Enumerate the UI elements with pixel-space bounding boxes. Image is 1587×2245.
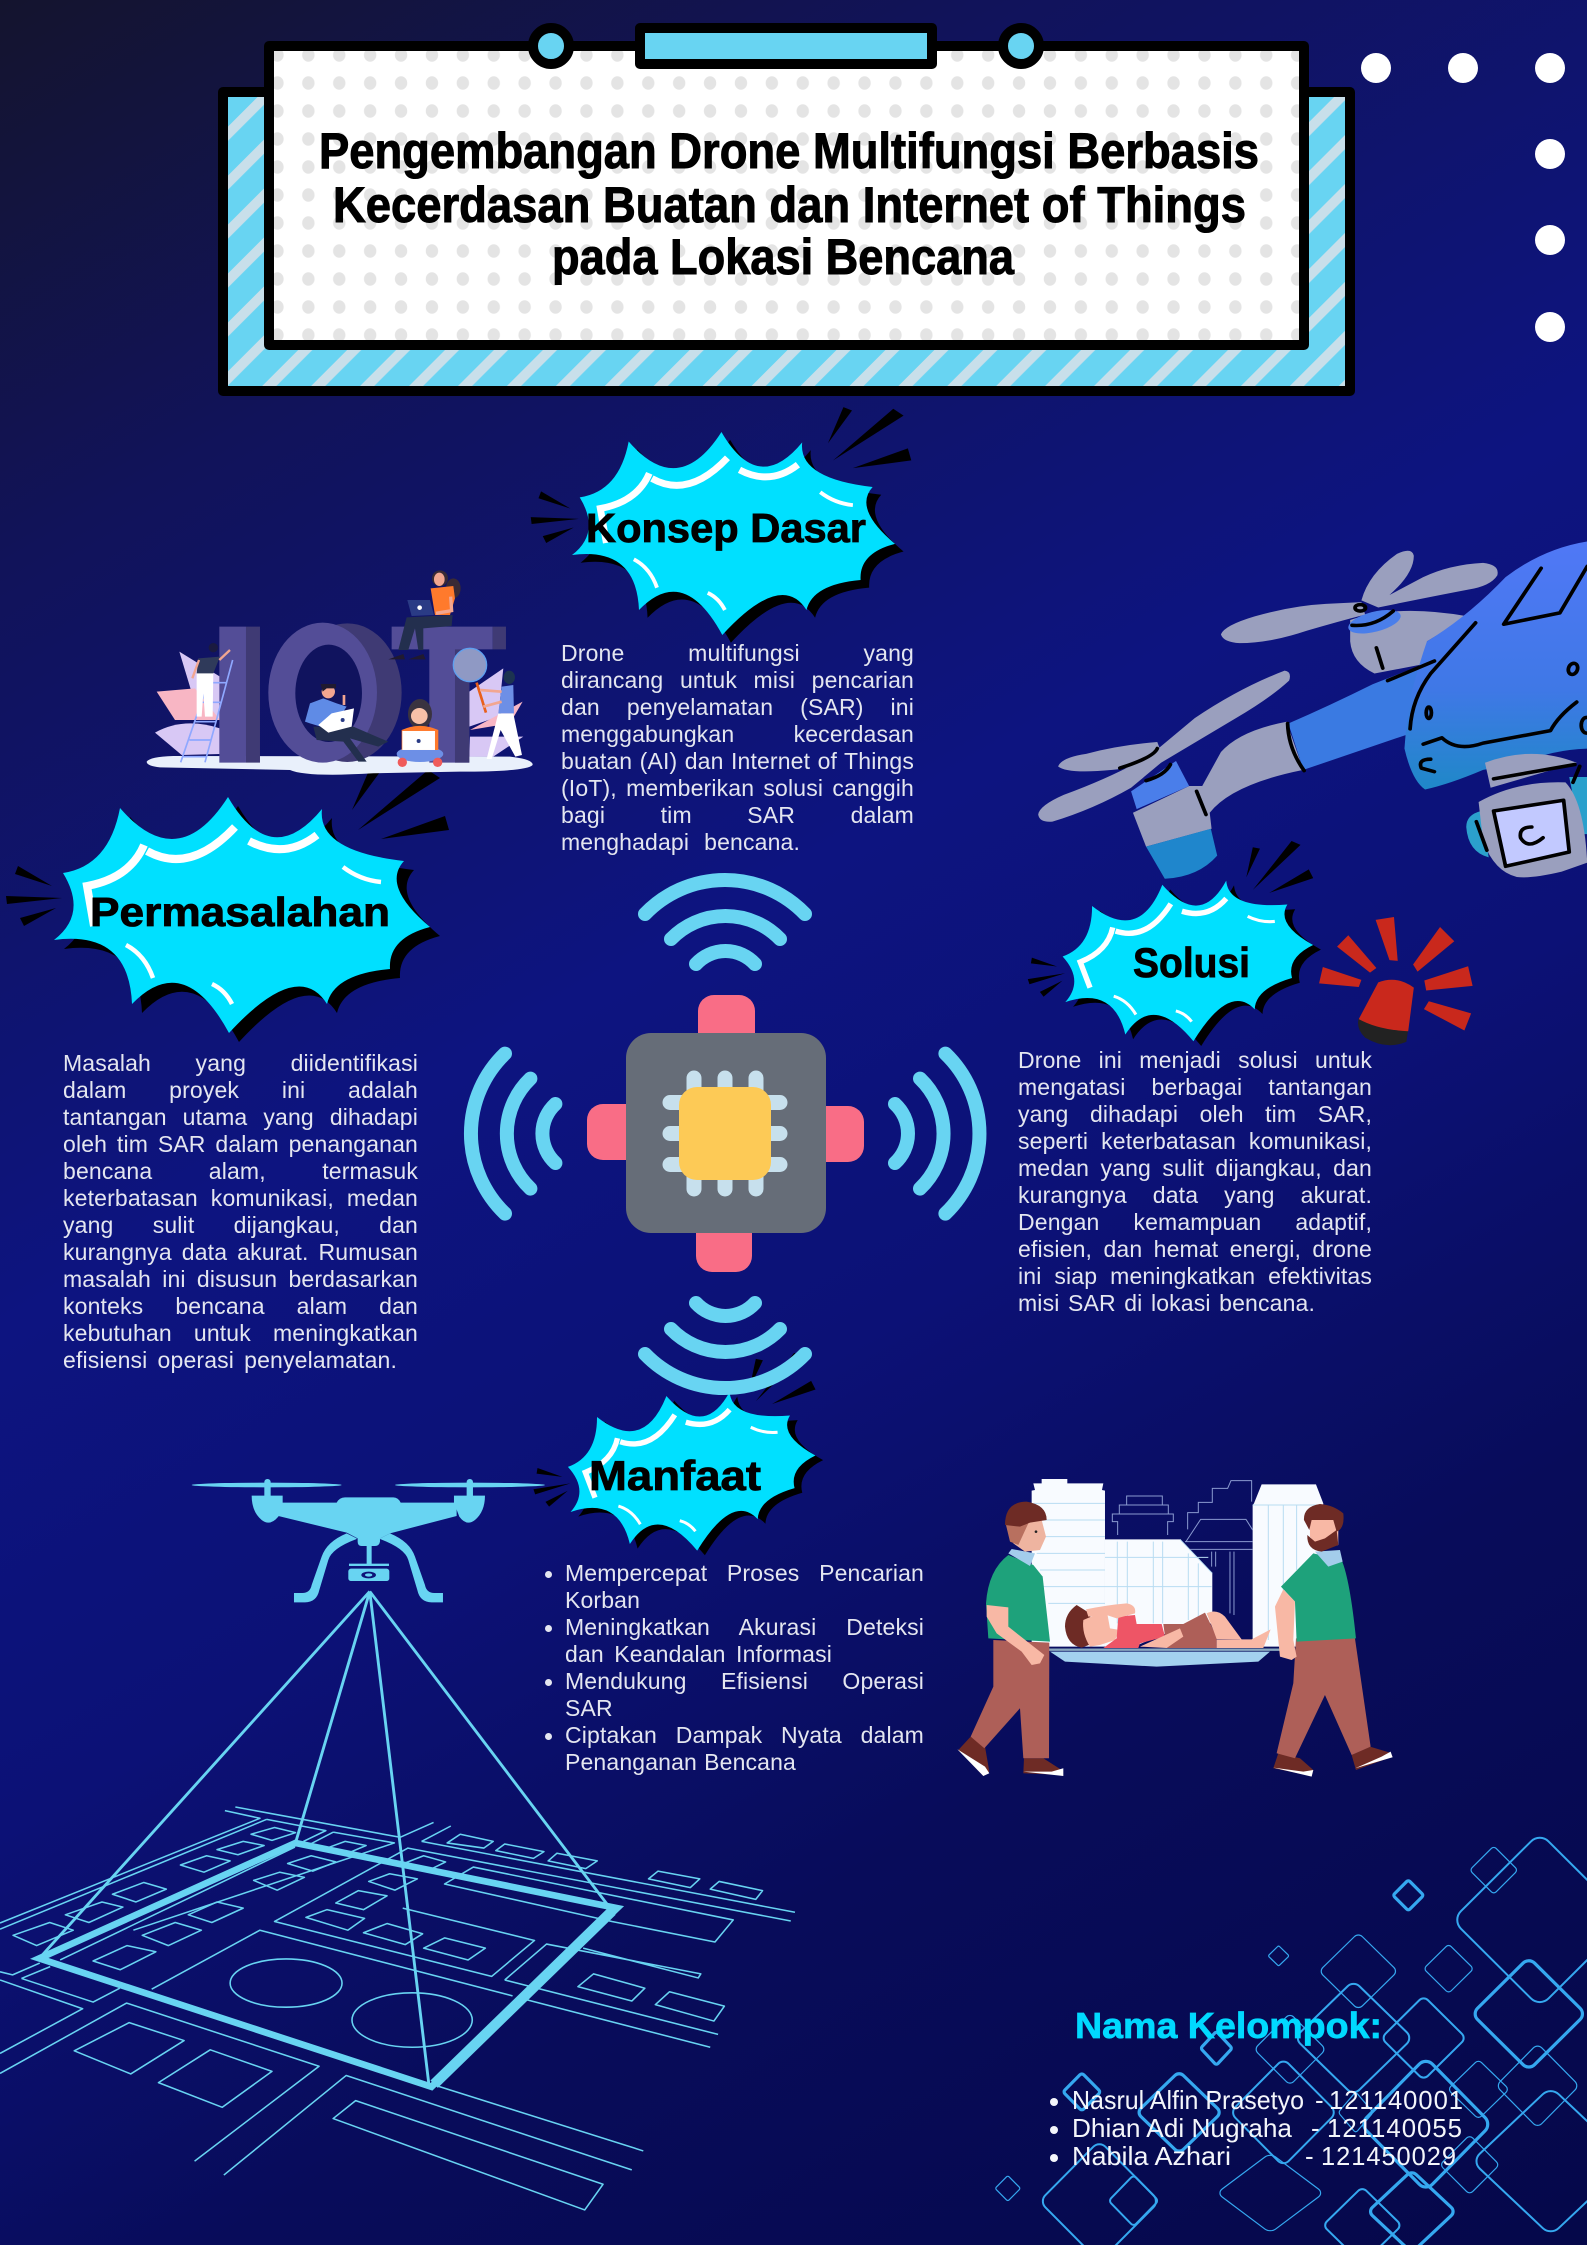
text: Konsep Dasar: menggabungkan kecerdasan bbox=[561, 720, 914, 746]
list: Manfaat: Mempercepat Proses Pencarian bbox=[565, 1560, 924, 1586]
text: Solusi: Drone ini menjadi solusi untuk bbox=[1018, 1046, 1372, 1072]
text: Konsep Dasar bbox=[561, 640, 914, 855]
text: Solusi: efisien, dan hemat energi, drone bbox=[1018, 1236, 1372, 1262]
list: team members: Nasrul Alfin Prasetyo bbox=[1072, 2085, 1304, 2115]
text: Permasalahan: efisiensi operasi penyelamatan. bbox=[63, 1347, 397, 1373]
scan cone lines bbox=[39, 1591, 609, 2084]
text: Solusi: Dengan kemampuan adaptif, bbox=[1018, 1208, 1372, 1234]
text: Konsep Dasar: buatan (AI) dan Internet of Things bbox=[561, 748, 914, 774]
list: team members: Dhian Adi Nugraha bbox=[1072, 2113, 1293, 2143]
text: Konsep Dasar: menghadapi bencana. bbox=[561, 828, 800, 854]
text: Permasalahan: oleh tim SAR dalam penanganan bbox=[63, 1131, 418, 1157]
icon: central chip with signals bbox=[471, 880, 979, 1388]
text: Solusi: yang dihadapi oleh tim SAR, bbox=[1018, 1100, 1372, 1126]
decorative diamond pattern bbox=[995, 1833, 1587, 2245]
list: Manfaat bbox=[545, 1560, 924, 1775]
burst: Solusi: Solusi bbox=[1133, 939, 1250, 986]
text: Konsep Dasar: (IoT), memberikan solusi canggih bbox=[561, 774, 914, 800]
text: Permasalahan: Masalah yang diidentifikasi bbox=[63, 1050, 418, 1076]
title text bbox=[319, 123, 1259, 285]
list: team members bbox=[1050, 2085, 1464, 2171]
wifi signal arcs bbox=[471, 880, 979, 1388]
list: team members: - bbox=[1311, 2113, 1320, 2143]
rescuer left bbox=[957, 1502, 1063, 1776]
text: Permasalahan: dalam proyek ini adalah bbox=[63, 1077, 418, 1103]
text: Solusi bbox=[1018, 1046, 1372, 1316]
list: Manfaat: Meningkatkan Akurasi Deteksi bbox=[565, 1614, 924, 1640]
list: Manfaat: Ciptakan Dampak Nyata dalam bbox=[565, 1722, 924, 1748]
text: Permasalahan bbox=[63, 1050, 418, 1373]
scan area frame bbox=[39, 1843, 617, 2087]
text: Solusi: misi SAR di lokasi bencana. bbox=[1018, 1290, 1315, 1316]
text: Konsep Dasar: bagi tim SAR dalam bbox=[561, 802, 914, 828]
burst: Permasalahan bbox=[6, 768, 449, 1042]
burst: Konsep Dasar bbox=[531, 407, 911, 643]
text: Solusi: seperti keterbatasan komunikasi, bbox=[1018, 1128, 1372, 1154]
text: Permasalahan: kurangnya data akurat. Rumusan bbox=[63, 1239, 418, 1265]
list: team members: - bbox=[1315, 2085, 1324, 2115]
illustration: rescuers with stretcher bbox=[957, 1479, 1393, 1777]
title text: pada Lokasi Bencana bbox=[552, 229, 1015, 285]
burst: Manfaat bbox=[517, 1349, 843, 1585]
text: Permasalahan: konteks bencana alam dan bbox=[63, 1293, 418, 1319]
text: Konsep Dasar: Drone multifungsi yang bbox=[561, 640, 914, 666]
list: team members: 121140001 bbox=[1329, 2085, 1464, 2115]
text: Permasalahan: kebutuhan untuk meningkatkan bbox=[63, 1320, 418, 1346]
text: Solusi: kurangnya data yang akurat. bbox=[1018, 1182, 1372, 1208]
list: team members: - bbox=[1305, 2141, 1314, 2171]
illustration: IoT team bbox=[147, 570, 533, 775]
text: Permasalahan: yang sulit dijangkau, dan bbox=[63, 1212, 418, 1238]
decorative white dots bbox=[1361, 53, 1565, 342]
list: team members: 121140055 bbox=[1327, 2113, 1463, 2143]
list: Manfaat: SAR bbox=[565, 1694, 613, 1720]
list: Manfaat: Penanganan Bencana bbox=[565, 1748, 796, 1774]
text: Permasalahan: bencana alam, termasuk bbox=[63, 1158, 418, 1184]
rescuer right bbox=[1273, 1504, 1393, 1777]
title text: Pengembangan Drone Multifungsi Berbasis bbox=[319, 123, 1259, 179]
burst: Permasalahan: Permasalahan bbox=[90, 889, 390, 935]
text: Solusi: mengatasi berbagai tantangan bbox=[1018, 1074, 1372, 1100]
text: Permasalahan: masalah ini disusun berdasarkan bbox=[63, 1266, 418, 1292]
title text: Kecerdasan Buatan dan Internet of Things bbox=[333, 177, 1246, 233]
list: Manfaat: dan Keandalan Informasi bbox=[565, 1640, 832, 1666]
burst: Manfaat: Manfaat bbox=[589, 1452, 761, 1499]
list: team members: Nabila Azhari bbox=[1072, 2141, 1231, 2171]
list: team members: 121450029 bbox=[1321, 2141, 1457, 2171]
burst: Konsep Dasar: Konsep Dasar bbox=[586, 505, 866, 551]
text: Permasalahan: tantangan utama yang dihadapi bbox=[63, 1104, 418, 1130]
burst: Solusi bbox=[1011, 837, 1341, 1076]
city map grid with drone scan cone bbox=[0, 1591, 795, 2210]
text: Solusi: medan yang sulit dijangkau, dan bbox=[1018, 1154, 1372, 1180]
icon: red alarm siren bbox=[1319, 917, 1473, 1045]
title panel bbox=[223, 28, 1350, 391]
small quadcopter drone bbox=[192, 1479, 545, 1602]
big tilted drone bbox=[1038, 541, 1587, 879]
list: Manfaat: Mendukung Efisiensi Operasi bbox=[565, 1668, 924, 1694]
text: Konsep Dasar: dirancang untuk misi pencarian bbox=[561, 666, 914, 692]
text: Solusi: ini siap meningkatkan efektivitas bbox=[1018, 1262, 1372, 1288]
heading: Nama Kelompok: Nama Kelompok: bbox=[1075, 2005, 1382, 2046]
list: Manfaat: Korban bbox=[565, 1586, 640, 1612]
text: Permasalahan: keterbatasan komunikasi, medan bbox=[63, 1185, 418, 1211]
text: Konsep Dasar: dan penyelamatan (SAR) ini bbox=[561, 694, 914, 720]
